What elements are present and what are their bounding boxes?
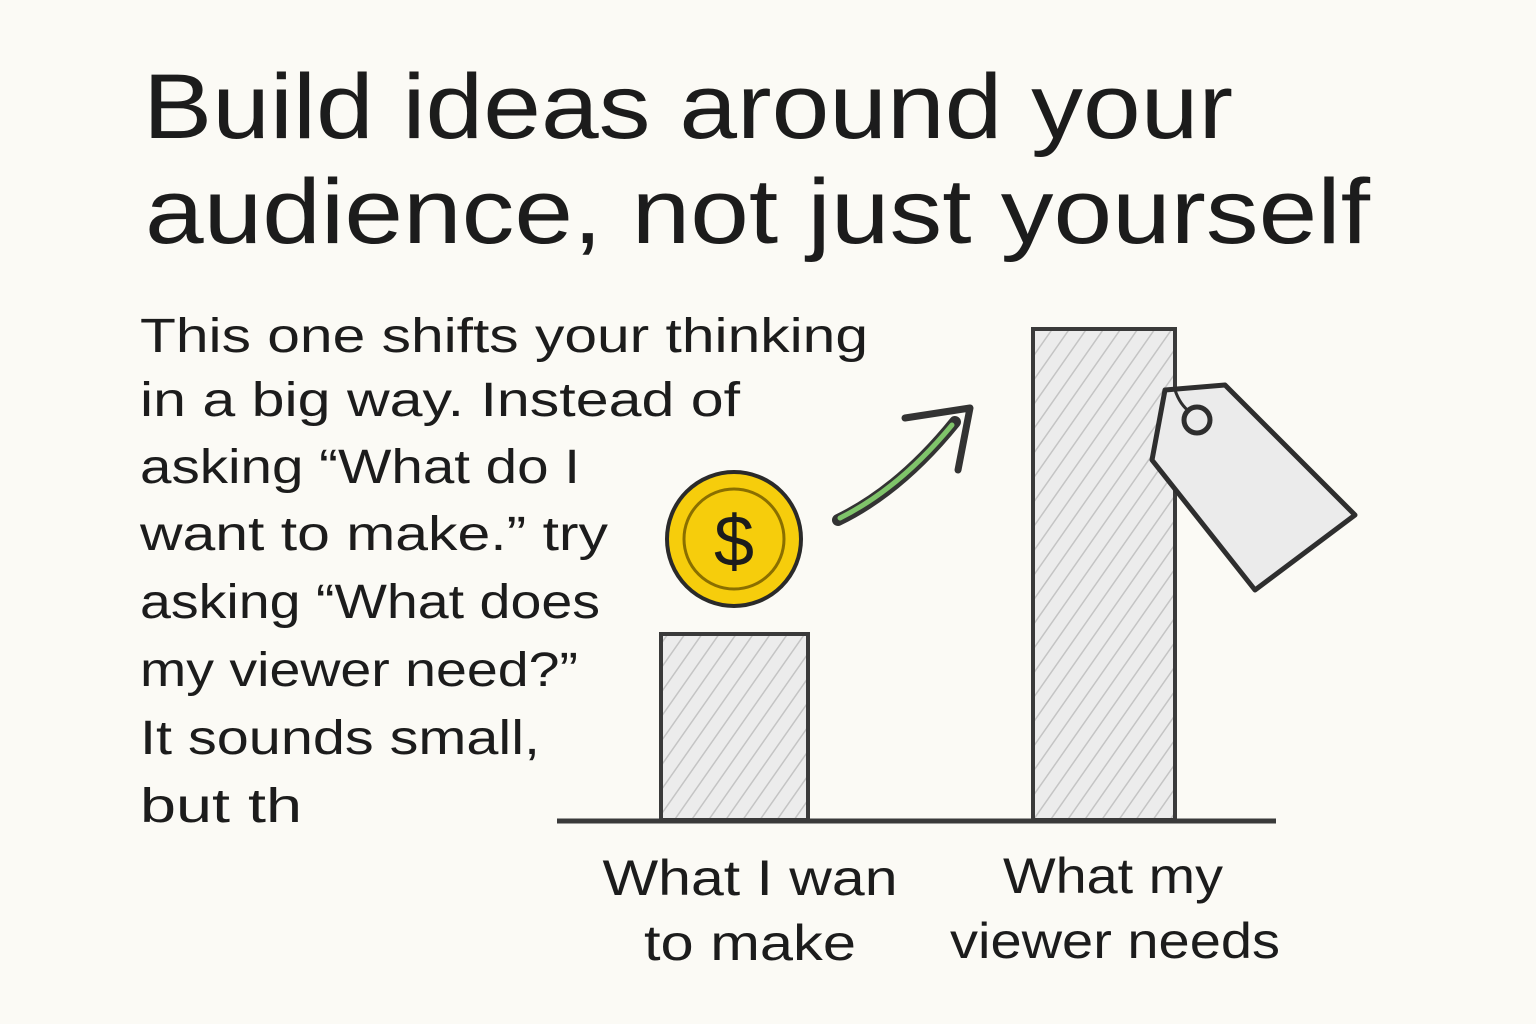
body text: in a big way. Instead of: [140, 374, 741, 427]
bar: what I want to make: [661, 634, 808, 820]
arrow: [838, 408, 970, 520]
body text: want to make.” try: [139, 508, 608, 561]
label: what I want to make: to make: [644, 915, 856, 971]
body text: This one shifts your thinking: [140, 310, 868, 363]
body text: asking “What do I: [140, 441, 580, 494]
title: [143, 56, 1370, 263]
body text: my viewer need?”: [140, 644, 578, 697]
bar: what my viewer needs: [1033, 329, 1175, 820]
label: what I want to make: What I wan: [602, 850, 898, 906]
label: what I want to make: [602, 850, 898, 971]
label: what my viewer needs: [950, 848, 1280, 969]
title: audience, not just yourself: [145, 161, 1370, 263]
title: Build ideas around your: [143, 56, 1233, 158]
body text: [139, 310, 868, 833]
icon: coin: $: [714, 502, 754, 582]
icon: price tag: [1152, 385, 1355, 590]
body text: It sounds small,: [140, 712, 540, 765]
body text: asking “What does: [140, 576, 600, 629]
label: what my viewer needs: viewer needs: [950, 913, 1280, 969]
body text: but th: [140, 780, 302, 833]
label: what my viewer needs: What my: [1003, 848, 1223, 904]
icon: coin: [667, 472, 801, 606]
baseline axis: [557, 818, 1276, 824]
